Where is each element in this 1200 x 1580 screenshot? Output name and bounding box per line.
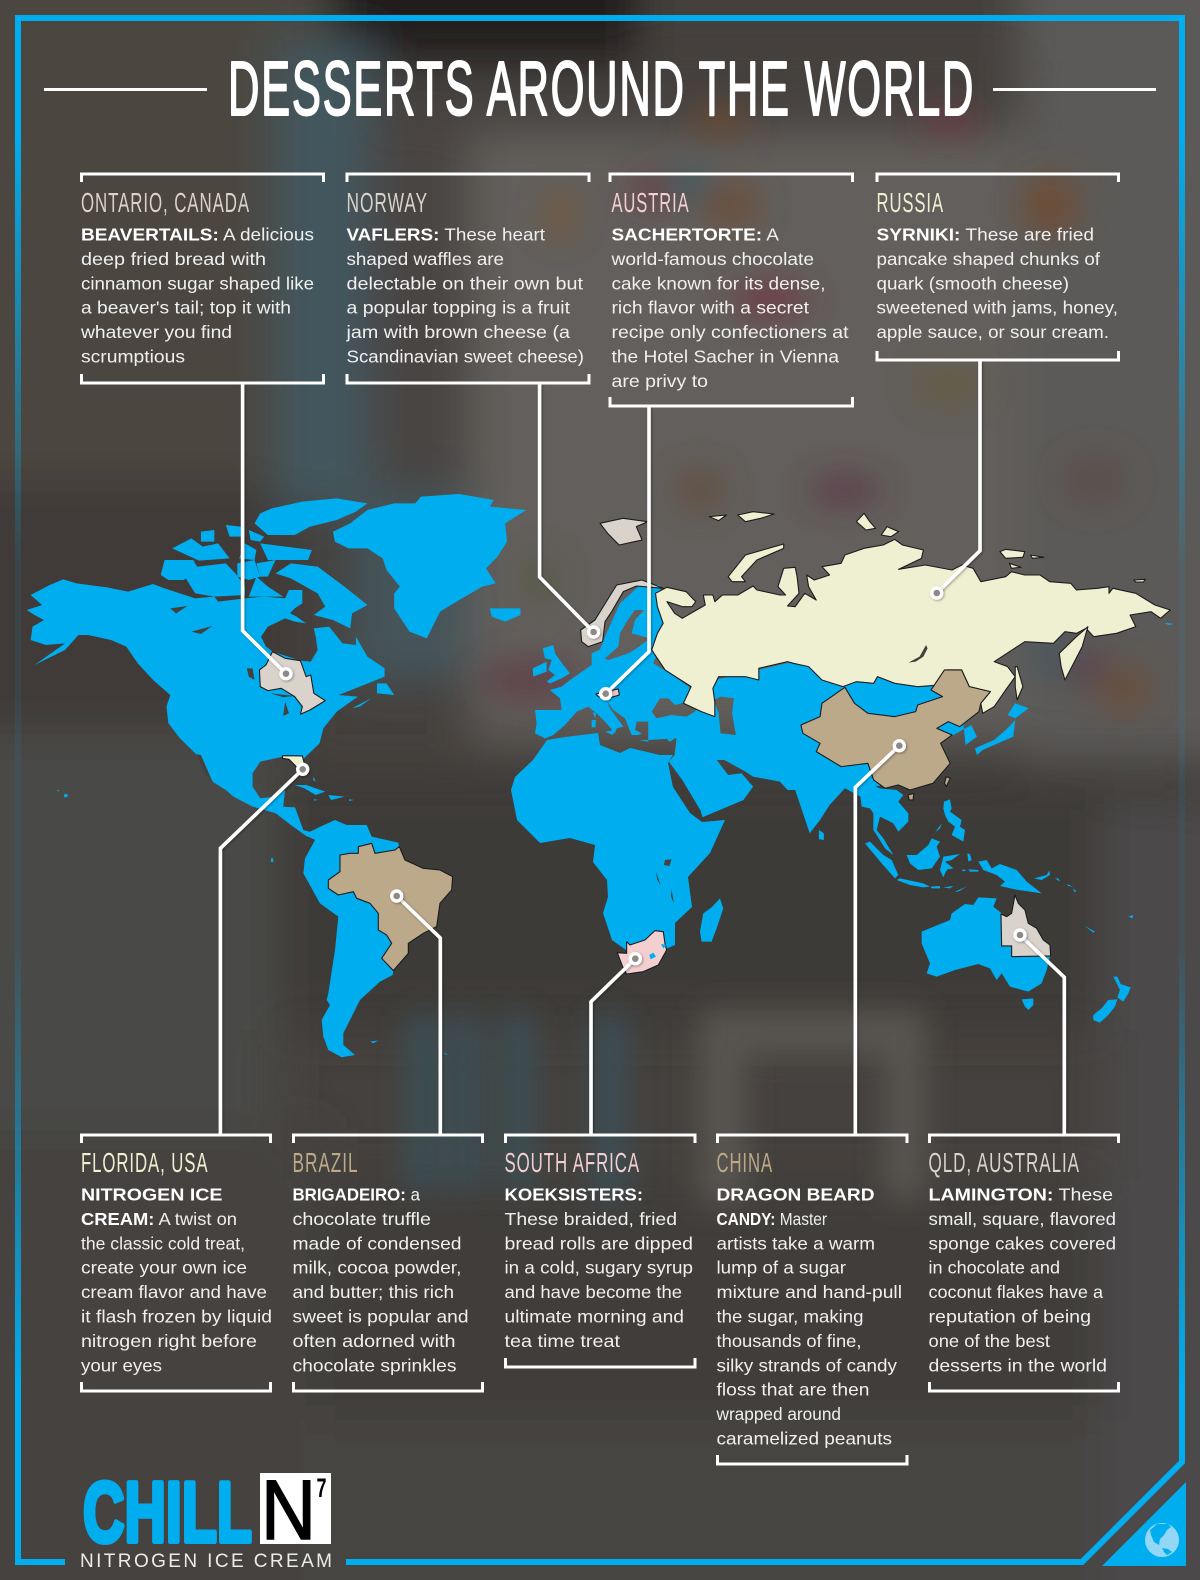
body: mixture and hand-pull	[716, 1282, 902, 1302]
panel: South Africa	[504, 1135, 695, 1367]
Southeast Asia	[860, 783, 1077, 893]
body: coconut flakes have a	[928, 1282, 1103, 1302]
body: chocolate truffle	[292, 1209, 431, 1229]
panel: Austria	[610, 174, 852, 406]
body: SACHERTORTE: A	[612, 224, 779, 244]
heading: FLORIDA, USA	[81, 1147, 208, 1178]
Queensland	[1001, 895, 1051, 957]
body: SYRNIKI: These are fried	[876, 224, 1094, 244]
body: silky strands of candy	[716, 1355, 897, 1375]
Norway and Svalbard	[581, 518, 663, 647]
body: thousands of fine,	[716, 1331, 862, 1351]
body: your eyes	[81, 1355, 162, 1375]
body: deep fried bread with	[81, 249, 266, 269]
world map	[27, 494, 1174, 1057]
body	[345, 224, 584, 366]
body: the classic cold treat,	[81, 1233, 245, 1253]
body: LAMINGTON: These	[928, 1184, 1113, 1204]
body: a popular topping is a fruit	[346, 298, 570, 318]
body: These braided, fried	[504, 1209, 677, 1229]
heading: BRAZIL	[292, 1147, 358, 1178]
Brazil	[328, 843, 453, 971]
body: one of the best	[928, 1331, 1050, 1351]
Europe	[533, 585, 693, 742]
title with side rules	[44, 46, 1156, 132]
body	[81, 1184, 272, 1375]
body: apple sauce, or sour cream.	[876, 322, 1109, 342]
body: chocolate sprinkles	[292, 1355, 457, 1375]
body: milk, cocoa powder,	[292, 1258, 462, 1278]
panel: Russia	[876, 174, 1118, 360]
heading: RUSSIA	[876, 187, 944, 218]
South America	[280, 807, 448, 1057]
heading: NORWAY	[346, 187, 428, 218]
panel: Norway	[345, 174, 589, 383]
Africa details	[656, 859, 723, 942]
body: recipe only confectioners at	[612, 322, 849, 342]
body: rich flavor with a secret	[612, 298, 809, 318]
body: often adorned with	[292, 1331, 456, 1351]
body: jam with brown cheese (a	[345, 322, 570, 342]
panel: Florida, USA	[81, 1135, 272, 1391]
Austria	[596, 689, 619, 698]
body: bread rolls are dipped	[504, 1233, 693, 1253]
wordmark: CHILL	[83, 1466, 252, 1560]
N7 box: 7	[316, 1473, 326, 1503]
heading: SOUTH AFRICA	[504, 1147, 640, 1178]
body: sweet is popular and	[292, 1306, 468, 1326]
body: the Hotel Sacher in Vienna	[612, 346, 839, 366]
body: BRIGADEIRO: a	[292, 1184, 420, 1204]
body: nitrogen right before	[81, 1331, 257, 1351]
Ontario	[259, 652, 325, 714]
body: cake known for its dense,	[612, 273, 826, 293]
body: a beaver's tail; top it with	[81, 298, 291, 318]
body: whatever you find	[80, 322, 232, 342]
icon: globe	[1145, 1523, 1179, 1557]
body: floss that are then	[716, 1380, 870, 1400]
body: CANDY: Master	[716, 1209, 827, 1229]
panel: Ontario, Canada	[80, 174, 323, 383]
body: cream flavor and have	[81, 1282, 267, 1302]
body: sponge cakes covered	[928, 1233, 1116, 1253]
body: sweetened with jams, honey,	[876, 298, 1118, 318]
body	[504, 1184, 693, 1351]
Florida	[282, 756, 309, 773]
tagline: NITROGEN ICE CREAM	[80, 1551, 332, 1572]
Russia and Arctic islands	[652, 512, 1170, 717]
body: and have become the	[504, 1282, 682, 1302]
body: pancake shaped chunks of	[876, 249, 1100, 269]
China	[801, 670, 990, 800]
Asia	[648, 623, 1174, 840]
body: scrumptious	[81, 346, 185, 366]
body: small, square, flavored	[928, 1209, 1116, 1229]
body: tea time treat	[504, 1331, 620, 1351]
heading: ONTARIO, CANADA	[81, 187, 250, 218]
South Africa	[617, 931, 667, 974]
body: shaped waffles are	[346, 249, 504, 269]
heading: AUSTRIA	[612, 187, 690, 218]
body: made of condensed	[292, 1233, 462, 1253]
body	[80, 224, 314, 366]
N7 box: N	[261, 1463, 316, 1557]
body: quark (smooth cheese)	[876, 273, 1069, 293]
body: in a cold, sugary syrup	[504, 1258, 693, 1278]
North America and Greenland	[27, 494, 526, 862]
body: VAFLERS: These heart	[346, 224, 545, 244]
connector lines	[220, 360, 1064, 1134]
body: reputation of being	[928, 1306, 1091, 1326]
body: CREAM: A twist on	[81, 1209, 237, 1229]
body: NITROGEN ICE	[81, 1184, 223, 1204]
heading: QLD, AUSTRALIA	[928, 1147, 1080, 1178]
body: and butter; this rich	[292, 1282, 454, 1302]
body: lump of a sugar	[716, 1258, 846, 1278]
body: it flash frozen by liquid	[81, 1306, 272, 1326]
body: ultimate morning and	[504, 1306, 684, 1326]
panel: QLD, Australia	[928, 1135, 1118, 1391]
body	[876, 224, 1118, 342]
heading: CHINA	[716, 1147, 773, 1178]
body: cinnamon sugar shaped like	[81, 273, 314, 293]
corner triangle with globe icon	[1102, 1482, 1186, 1566]
body: DRAGON BEARD	[716, 1184, 874, 1204]
body: the sugar, making	[716, 1306, 864, 1326]
body	[292, 1184, 468, 1375]
body: desserts in the world	[928, 1355, 1107, 1375]
logo: Chill N7 Nitrogen Ice Cream	[80, 1463, 332, 1572]
body: wrapped around	[716, 1404, 841, 1424]
location markers	[281, 588, 1025, 964]
panel: China	[716, 1135, 907, 1464]
Australia and New Zealand	[922, 895, 1133, 1023]
body: Scandinavian sweet cheese)	[346, 346, 584, 366]
body: delectable on their own but	[346, 273, 583, 293]
body	[610, 224, 849, 391]
body: artists take a warm	[716, 1233, 875, 1253]
body: create your own ice	[81, 1258, 247, 1278]
body: are privy to	[612, 371, 708, 391]
body: in chocolate and	[928, 1258, 1060, 1278]
body	[716, 1184, 902, 1448]
panel: Brazil	[292, 1135, 482, 1391]
Africa	[511, 733, 725, 960]
body: BEAVERTAILS: A delicious	[81, 224, 314, 244]
North America lakes	[170, 606, 295, 784]
body: world-famous chocolate	[610, 249, 814, 269]
body	[928, 1184, 1116, 1375]
body: KOEKSISTERS:	[504, 1184, 643, 1204]
body: caramelized peanuts	[716, 1428, 892, 1448]
